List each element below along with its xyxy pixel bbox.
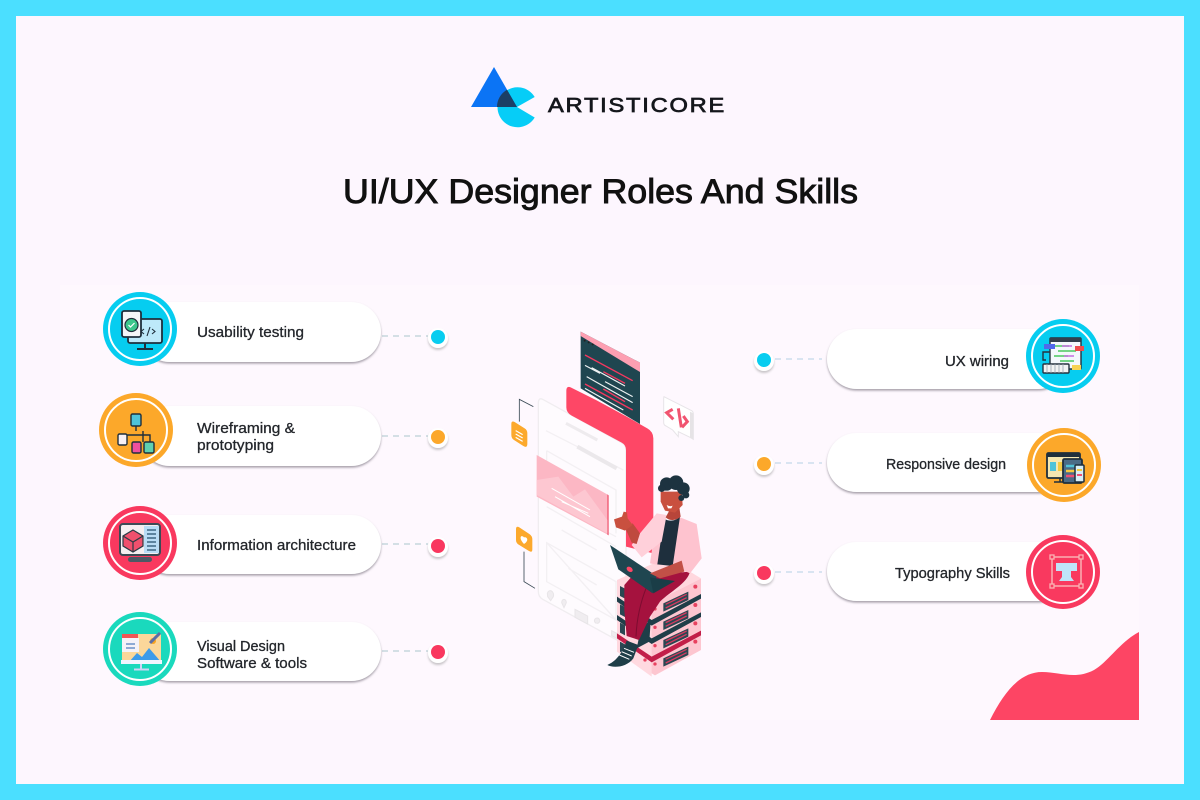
panel: information architecture [103,506,448,580]
icon: responsive devices [1027,428,1101,502]
legs [624,572,690,640]
decorative red wave [990,632,1139,720]
orange heart tag [516,527,532,552]
dashed connector [775,571,822,573]
dashed connector [775,462,822,464]
forearm [650,561,684,578]
face [661,492,683,513]
panel: typography skills [754,535,1100,609]
dashed connector [382,435,428,437]
connector dot [428,537,448,557]
red tab panel [566,387,653,553]
pink image card [537,455,609,535]
designer figure [607,475,702,667]
label: Information architecture [197,537,356,554]
far shoe [637,622,651,648]
dashed connector [382,543,428,545]
label: Typography Skills [895,565,1010,582]
pill [140,302,381,362]
server stack [617,557,701,677]
shirt [657,517,680,566]
hair [658,475,690,501]
connector dot [428,328,448,348]
connector dot [754,455,774,475]
panel: visual design software and tools [103,612,448,686]
panel: responsive design [754,428,1101,502]
panel: usability testing [103,292,448,366]
icon: 3D cube monitor [103,506,177,580]
icon: letter T with bounding box [1026,535,1100,609]
icon: flow chart [99,393,173,467]
panel: UX wiring [754,319,1100,393]
icon: design monitor [103,612,177,686]
label: UX wiring [945,353,1009,370]
connector arrows [519,399,535,588]
label [197,638,307,672]
connector dot [754,351,774,371]
panel: wireframing and prototyping [99,393,448,467]
pill [827,433,1068,492]
server tier 2 [617,597,701,644]
dashed connector [382,650,428,652]
phone wireframe [538,399,626,645]
content backdrop [60,285,1139,720]
logo: ARTISTICORE [548,95,726,117]
label: Responsive design [886,456,1006,473]
orange note tag [511,421,527,447]
label: prototyping [197,437,274,454]
near shoe [607,641,638,667]
connector dot [428,643,448,663]
pill [827,542,1068,601]
coat sleeve [632,513,667,557]
label: Software & tools [197,655,307,672]
logo [471,67,726,127]
icon: code window and keyboard [1026,319,1100,393]
server tier 3 [617,615,701,662]
connector dot [754,564,774,584]
pill [827,329,1068,389]
dashed connector [382,335,428,337]
code window [581,332,640,424]
connector dot [428,428,448,448]
title: UI/UX Designer Roles And Skills [343,173,858,211]
raised arm and hand [625,523,640,544]
dashed connector [775,358,822,360]
speech bubble with code icon [664,397,693,439]
illustration: designer with phone wireframe and servers [511,332,702,677]
pill [140,515,381,574]
label: Wireframing & [197,420,295,437]
icon: clipboard and monitor [103,292,177,366]
pill [140,622,381,681]
laptop [610,545,657,593]
label: Visual Design [197,638,285,655]
server tier 1 [617,557,701,626]
label: Usability testing [197,324,304,341]
coat torso [650,517,702,573]
neck [666,507,681,520]
label [197,420,295,454]
server tier 4 [617,633,701,677]
pill [140,406,381,466]
